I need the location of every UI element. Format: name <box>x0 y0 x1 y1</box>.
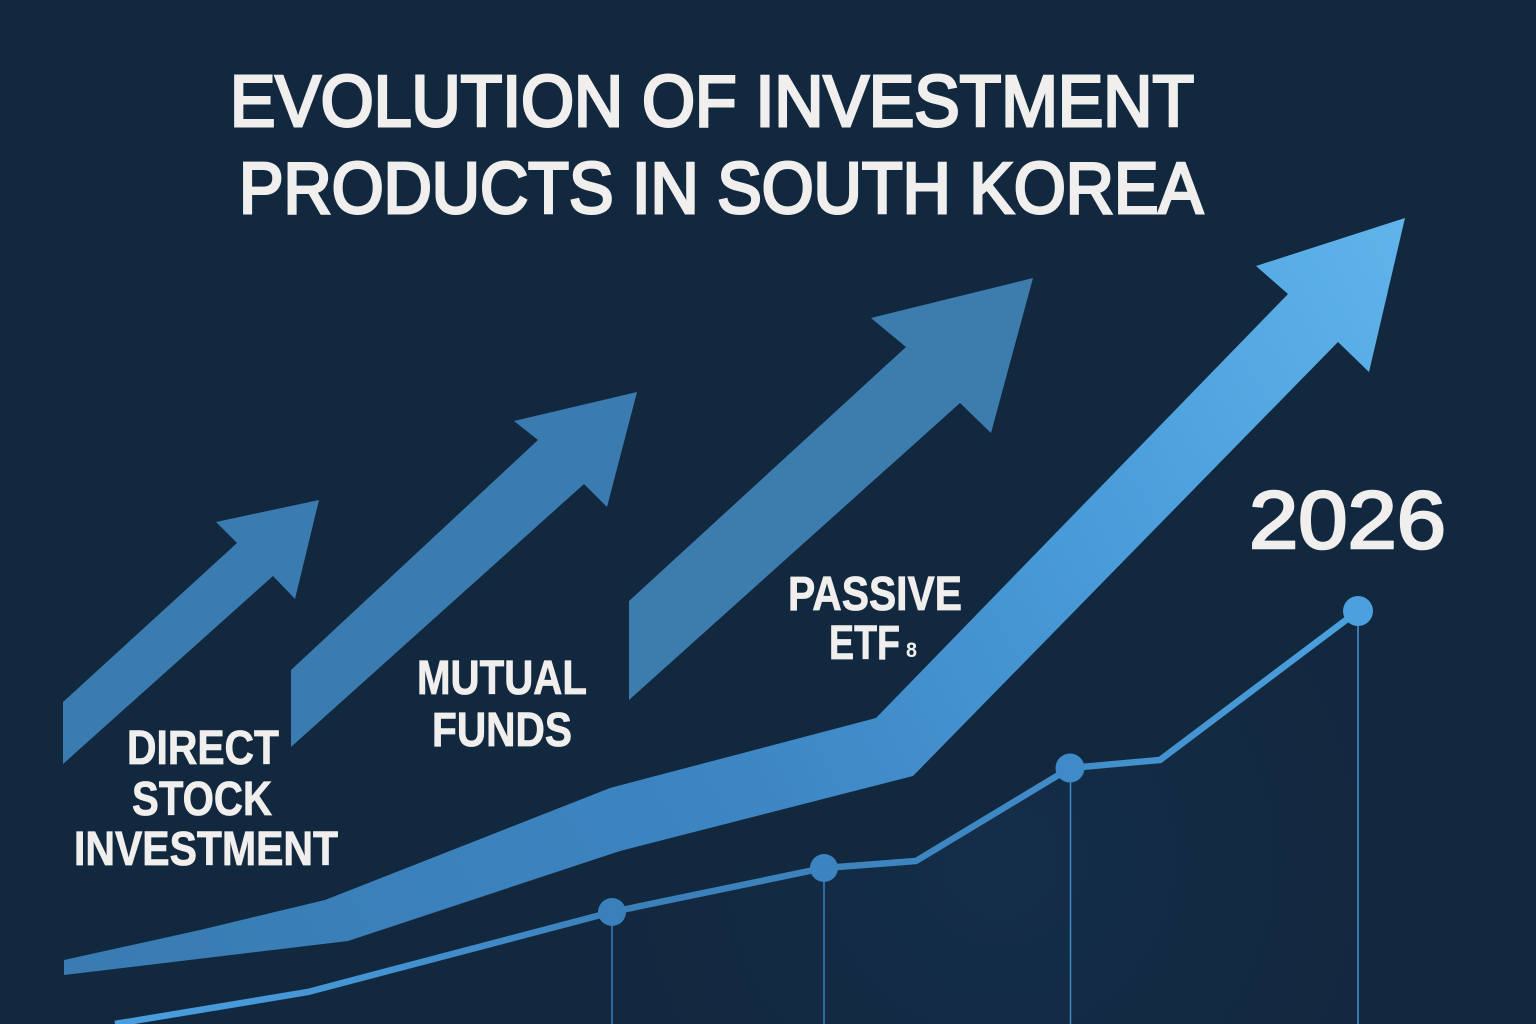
label: passive ETFs: 8 <box>906 639 917 662</box>
label: mutual funds: FUNDS <box>432 704 572 757</box>
arrow: main growth arrow <box>64 218 1405 975</box>
label: passive ETFs: PASSIVE <box>788 568 962 621</box>
label: passive ETFs <box>788 568 962 670</box>
label: mutual funds <box>417 652 587 757</box>
arrow: mutual funds <box>291 392 637 747</box>
label: direct stock investment: DIRECT <box>127 722 279 775</box>
line chart <box>115 596 1373 1024</box>
label: passive ETFs: ETF <box>829 617 900 670</box>
drop lines <box>612 611 1358 1024</box>
year label: 2026: 2026 <box>1249 475 1446 566</box>
label: direct stock investment: STOCK <box>132 773 272 826</box>
title: PRODUCTS IN SOUTH KOREA <box>239 149 1203 229</box>
title: EVOLUTION OF INVESTMENT <box>230 62 1194 142</box>
trend line <box>115 611 1358 1024</box>
arrow: passive ETFs <box>629 278 1033 700</box>
label: direct stock investment <box>74 722 338 876</box>
chart area shading <box>115 611 1358 1024</box>
label: mutual funds: MUTUAL <box>417 652 587 705</box>
label: direct stock investment: INVESTMENT <box>74 823 338 876</box>
title <box>230 62 1203 229</box>
arrow: direct stock investment <box>63 500 319 764</box>
data points <box>598 596 1373 926</box>
